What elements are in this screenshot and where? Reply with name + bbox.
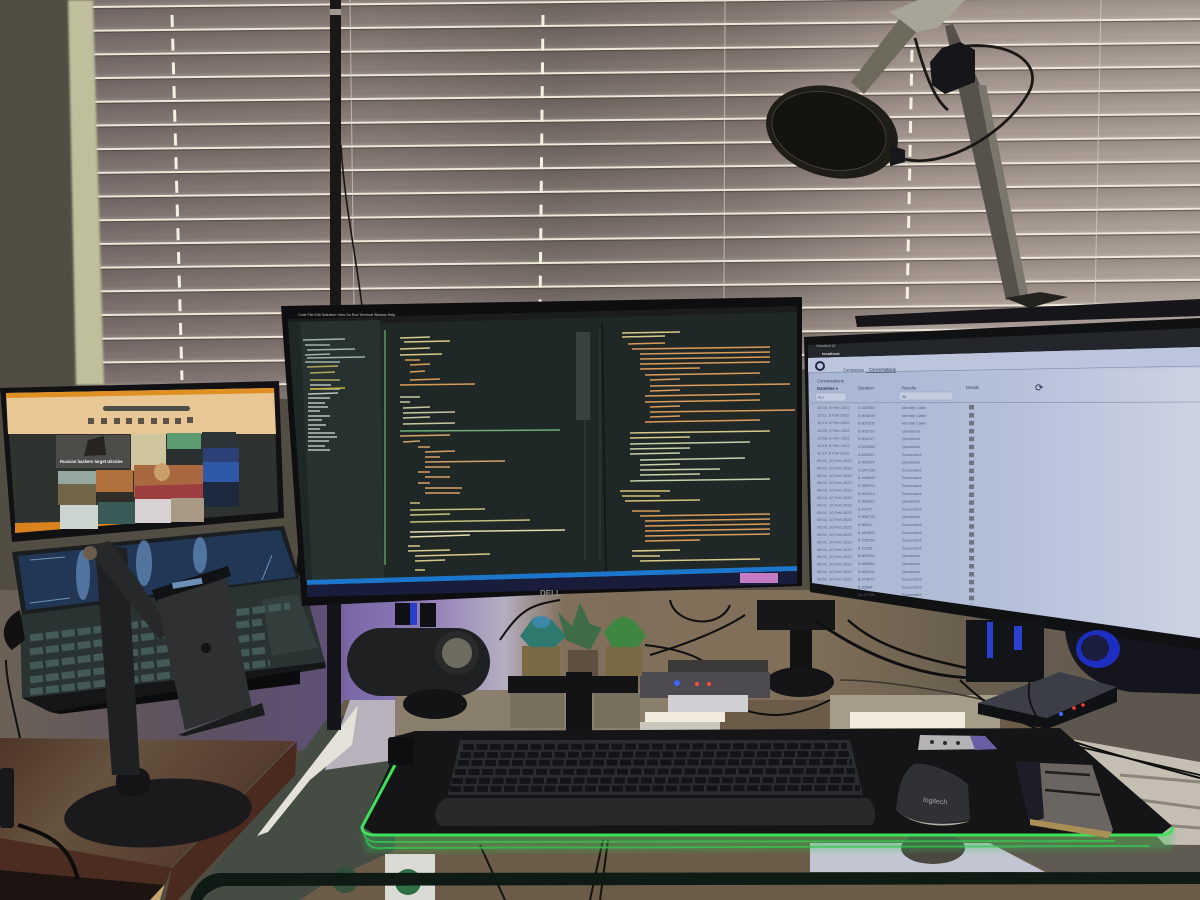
duration column: 21.37790 bbox=[858, 592, 875, 597]
right monitor bezel bbox=[804, 318, 1200, 652]
date column: 15:03, 8 Feb 2022 bbox=[817, 405, 850, 410]
date column: 08:02, 10 Feb 2022 bbox=[817, 480, 852, 485]
smartphone bbox=[1016, 762, 1113, 838]
duration column: 0.006895 bbox=[858, 413, 875, 418]
result column: Questions bbox=[902, 499, 920, 504]
result column: Questions bbox=[902, 553, 920, 558]
application window: Conversations bbox=[869, 367, 896, 372]
mini PC bbox=[978, 672, 1200, 775]
application window bbox=[808, 347, 1200, 638]
result column: Questions bbox=[902, 561, 920, 566]
laptop keyboard deck bbox=[4, 553, 326, 714]
result column: Successful bbox=[902, 530, 921, 535]
window blinds bbox=[92, 0, 1200, 400]
result column: Successful bbox=[902, 483, 921, 488]
table headers: Duration bbox=[858, 386, 874, 390]
potted succulents bbox=[520, 603, 646, 676]
keyboard wrist rest bbox=[435, 798, 875, 826]
result column: Questions bbox=[902, 514, 920, 519]
date column: 15:09, 8 Feb 2022 bbox=[817, 428, 850, 433]
duration column: 6.41586 bbox=[858, 545, 873, 550]
date column: 09:02, 10 Feb 2022 bbox=[817, 465, 852, 470]
duration column: 8.979670 bbox=[858, 577, 875, 582]
monitor brand logo: DELL bbox=[540, 589, 561, 598]
filter dropdowns: ALL bbox=[818, 396, 825, 400]
result column: Questions bbox=[902, 444, 920, 449]
duration column: 5.958726 bbox=[858, 514, 875, 519]
date column: 09:01, 10 Feb 2022 bbox=[817, 458, 852, 463]
date column: 08:01, 10 Feb 2022 bbox=[817, 562, 852, 567]
result column: Successful bbox=[902, 538, 921, 543]
result column: Successful bbox=[902, 545, 921, 550]
date column: 08:01, 10 Feb 2022 bbox=[817, 576, 852, 581]
mouse: logitech bbox=[923, 797, 948, 807]
logo bbox=[816, 362, 824, 370]
duration column: 0.647138 bbox=[858, 467, 875, 472]
duration column: 5.448599 bbox=[858, 475, 875, 480]
date column: 08:01, 10 Feb 2022 bbox=[817, 473, 852, 478]
laptop second screen with blueprint bbox=[12, 526, 300, 616]
date column: 11:27, 8 Feb 2022 bbox=[817, 451, 850, 456]
date column: 08:01, 10 Feb 2022 bbox=[817, 547, 852, 552]
date column: 15:13, 8 Feb 2022 bbox=[817, 420, 850, 425]
power strip under glass bbox=[332, 854, 435, 900]
result column: Successful bbox=[902, 475, 921, 480]
date column: 08:04, 10 Feb 2022 bbox=[817, 495, 852, 500]
right monitor: localhost bbox=[822, 351, 840, 356]
microphone pop filter bbox=[756, 72, 908, 192]
glass reflection streaks bbox=[257, 705, 358, 836]
duration column: 6.484604 bbox=[858, 530, 875, 535]
device stand on desk bbox=[508, 672, 720, 738]
result column: Successful bbox=[902, 584, 921, 589]
duration column: 5.795754 bbox=[858, 538, 875, 543]
code editor window bbox=[288, 306, 797, 597]
table headers: Datetime ▾ bbox=[817, 386, 839, 391]
laptop browser page: Russian hackers target Ukraine bbox=[60, 459, 123, 464]
table headers: Results bbox=[902, 386, 916, 390]
left code pane bbox=[400, 337, 565, 570]
tablet stand bbox=[62, 541, 265, 853]
result column: Identify Caller bbox=[902, 421, 927, 426]
date column: 08:01, 10 Feb 2022 bbox=[817, 569, 852, 574]
keyboard bbox=[448, 740, 863, 795]
status bar bbox=[307, 566, 797, 585]
date column: 14:15, 8 Feb 2022 bbox=[817, 443, 850, 448]
duration column: 0.007505 bbox=[858, 421, 875, 426]
result column: Successful bbox=[902, 452, 921, 457]
table headers bbox=[817, 378, 979, 391]
conversation table bbox=[817, 405, 927, 597]
bright reflection strips bbox=[645, 712, 965, 728]
duration column: 5.956110 bbox=[858, 569, 875, 574]
duration column: 5.550319 bbox=[858, 491, 875, 496]
right monitor: Voicebot UI bbox=[816, 344, 835, 348]
table headers: Details bbox=[966, 385, 979, 390]
date column: 08:01, 10 Feb 2022 bbox=[817, 539, 852, 544]
remote control bbox=[918, 735, 997, 750]
space under monitors: stand and cables bbox=[395, 600, 1200, 778]
date column: 08:01, 10 Feb 2022 bbox=[817, 554, 852, 559]
monitor light bar bbox=[855, 299, 1200, 327]
monitor reflection in glass bbox=[810, 843, 1045, 872]
main monitor bezel bbox=[281, 297, 802, 606]
result column: Successful bbox=[902, 467, 921, 472]
detail buttons bbox=[969, 405, 974, 604]
result column: Successful bbox=[902, 491, 921, 496]
microphone cable bbox=[900, 38, 1033, 161]
tabs: Campaigns bbox=[843, 368, 864, 372]
result column: Successful bbox=[902, 592, 921, 597]
duration column: 6.35584 bbox=[858, 584, 873, 589]
result column: Successful bbox=[902, 506, 921, 511]
tablet holder bbox=[152, 566, 265, 736]
date column: 08:03, 10 Feb 2022 bbox=[817, 488, 852, 493]
webcam speaker bbox=[347, 628, 490, 719]
cable at left edge bbox=[6, 660, 20, 738]
window frame bbox=[68, 0, 104, 385]
date column: 08:01, 10 Feb 2022 bbox=[817, 510, 852, 515]
monitor arm post bbox=[327, 600, 341, 730]
refresh icon: ⟳ bbox=[1035, 383, 1044, 394]
RGB desk mat bbox=[362, 728, 1174, 852]
file explorer bbox=[303, 339, 365, 450]
date column: 08:01, 10 Feb 2022 bbox=[817, 532, 852, 537]
right monitor bbox=[804, 318, 1200, 652]
laptop bbox=[0, 381, 326, 714]
minimap bbox=[576, 332, 590, 420]
mouse bbox=[896, 764, 970, 825]
date column: 08:02, 10 Feb 2022 bbox=[817, 517, 852, 522]
result column: Successful bbox=[902, 522, 921, 527]
filter dropdowns: All bbox=[902, 395, 906, 399]
duration column: 5.958584 bbox=[858, 561, 875, 566]
result column: Questions bbox=[902, 436, 920, 441]
duration column: 5.845061 bbox=[858, 452, 875, 457]
date column: 14:58, 8 Feb 2022 bbox=[817, 435, 850, 440]
table headers: Conversations bbox=[817, 378, 844, 384]
right code pane bbox=[620, 332, 795, 561]
duration column: 0.000029 bbox=[858, 460, 875, 465]
network hub with lights bbox=[640, 660, 770, 712]
main monitor bbox=[281, 297, 802, 606]
duration column: 8.505333 bbox=[858, 553, 875, 558]
filter dropdowns bbox=[816, 392, 953, 401]
browser chrome bbox=[808, 328, 1200, 358]
duration column: 0.008117 bbox=[858, 436, 875, 441]
duration column: 0.002793 bbox=[858, 428, 875, 433]
glass front rail bbox=[190, 872, 1200, 900]
result column: Questions bbox=[902, 460, 920, 465]
duration column: 5.551833 bbox=[858, 499, 875, 504]
result column: Successful bbox=[902, 577, 921, 582]
desk glass surface bbox=[190, 690, 1200, 900]
blue lit speakers bbox=[966, 620, 1200, 694]
result column: Questions bbox=[902, 569, 920, 574]
duration column: 0.010560 bbox=[858, 405, 875, 410]
duration column: 5.359576 bbox=[858, 483, 875, 488]
microphone boom arm bbox=[851, 0, 1068, 308]
thin floor lamp pole bbox=[330, 0, 362, 306]
duration column: 5.41875 bbox=[858, 506, 873, 511]
result column: Identify Caller bbox=[902, 405, 927, 410]
result column: Identify Caller bbox=[902, 413, 927, 418]
result column: Questions bbox=[902, 428, 920, 433]
laptop screen bezel bbox=[0, 381, 284, 542]
menu bar: Code File Edit Selection View Go Run Terminal Window Help bbox=[298, 313, 395, 317]
date column: 15:11, 8 Feb 2022 bbox=[817, 413, 850, 418]
laptop browser page bbox=[6, 388, 278, 533]
date column: 08:03, 10 Feb 2022 bbox=[817, 525, 852, 530]
duration column: 0.008386 bbox=[858, 444, 875, 449]
duration column: 6.96811 bbox=[858, 522, 873, 527]
date column: 08:01, 10 Feb 2022 bbox=[817, 502, 852, 507]
wooden side table bbox=[0, 738, 297, 900]
